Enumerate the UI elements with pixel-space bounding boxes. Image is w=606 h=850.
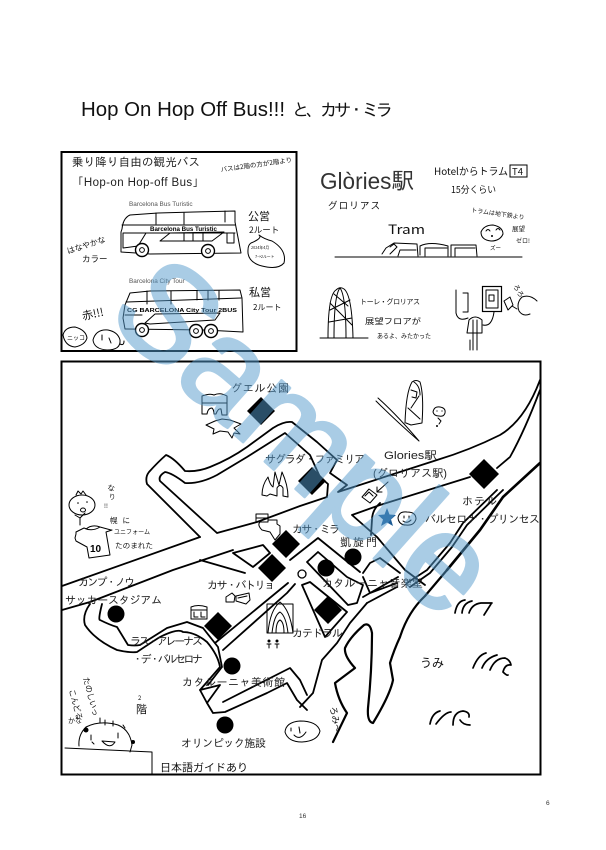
icon: Casa Mila building xyxy=(256,514,280,540)
marker: hotel xyxy=(469,459,499,489)
map labels: カタルーニャ美術館 xyxy=(182,676,285,689)
handwritten note: private 2 routes: 私営 xyxy=(249,284,271,300)
panel: Glories station notes xyxy=(320,163,537,350)
handwritten note: uniform: 幌に xyxy=(110,515,130,526)
icon: boy character with note: な xyxy=(106,482,116,494)
icon: blob character with sign xyxy=(65,718,152,774)
map labels: バルセロナ・プリンセス xyxy=(425,513,540,526)
map labels: Glories駅 xyxy=(384,450,437,462)
map labels: ホテル xyxy=(462,496,497,508)
icon: bottom face xyxy=(285,721,320,742)
handwritten note: fun xyxy=(66,676,101,726)
watermark: Sample: Sample xyxy=(85,227,527,644)
speech bubble note xyxy=(248,235,284,267)
label: Tram: Tram xyxy=(388,219,425,238)
panel heading xyxy=(72,156,204,189)
icon: waves xyxy=(430,600,511,725)
handwritten note: tower: あるよ、みたかった xyxy=(377,330,431,340)
title xyxy=(81,99,393,121)
handwritten note: tower: トーレ・グロリアス xyxy=(360,297,420,307)
handwritten note: from hotel by tram: T4 xyxy=(512,164,523,178)
page number: 16 xyxy=(299,813,307,820)
panel: hop-on hop-off bus xyxy=(62,152,296,351)
icon: boy character with note xyxy=(69,482,116,525)
map labels: (グロリアス駅) xyxy=(373,468,447,480)
handwritten heading: Glories station xyxy=(320,168,414,212)
star: Barcelona Princess xyxy=(378,508,396,526)
marker: Park Guell xyxy=(247,397,275,425)
small roundabout xyxy=(298,570,306,578)
handwritten note: uniform: たのまれた xyxy=(115,541,153,551)
marker: Palau de la Musica xyxy=(318,560,334,576)
icon: small face on map xyxy=(433,407,445,427)
handwritten note: uniform xyxy=(110,515,153,551)
speech bubble note: 2024年4月 xyxy=(251,245,269,251)
marker: Casa Batllo xyxy=(258,554,286,582)
marker: art museum xyxy=(224,658,240,674)
icon: uniform T-shirt xyxy=(75,526,112,558)
handwritten note: second floor: 2 xyxy=(138,693,142,702)
speech bubble note: 7→2ルート xyxy=(255,255,275,260)
handwritten heading: Glories station: グロリアス xyxy=(328,198,380,212)
icon: face with tram note: ズー xyxy=(490,244,501,252)
handwritten note: from hotel by tram xyxy=(434,163,527,196)
handwritten note: public 2 routes: 2ルート xyxy=(249,224,279,236)
icon: Park Guell lizard xyxy=(206,419,241,438)
map labels: カンプ・ノウ xyxy=(78,576,135,589)
icon: boy character with note: り xyxy=(109,491,116,501)
handwritten note: fun: こんどる xyxy=(66,688,85,721)
marker: Casa Mila xyxy=(272,530,300,558)
icon: two small people xyxy=(267,640,279,648)
map labels: ・デ・バルセロナ xyxy=(132,653,203,666)
panel heading: 乗り降り自由の観光バス xyxy=(72,156,200,169)
icon: two blob faces: ニッコ xyxy=(67,333,85,342)
map labels: カタルーニャ音楽堂 xyxy=(322,577,423,590)
handwritten note: uniform: ユニフォーム xyxy=(114,527,150,536)
panel heading: 「Hop-on Hop-off Bus」 xyxy=(72,176,204,189)
icon: face with tram note: 展望 xyxy=(512,223,526,233)
icon: Torre Glories tower xyxy=(320,288,368,338)
map labels: カサ・バトリョ xyxy=(207,580,275,592)
marker: Arc de Triomf xyxy=(344,548,362,566)
marker: Camp Nou xyxy=(108,606,124,622)
icon: Bus Turistic double-decker: Barcelona Bus Turistic xyxy=(150,226,217,233)
handwritten note: colours: カラー xyxy=(82,253,108,265)
handwritten note: colours: はなやかな xyxy=(66,234,107,257)
handwritten note: public 2 routes: 公営 xyxy=(248,208,270,224)
icon: Las Arenas building xyxy=(191,606,207,619)
icon: Sagrada Familia towers xyxy=(262,472,288,497)
handwritten note: top right: バスは2階の方が2階より xyxy=(220,154,293,174)
icon: face with tram note: トラムは地下鉄より xyxy=(471,205,525,221)
handwritten note: fun: かな xyxy=(68,716,82,726)
icon: Casa Batllo building xyxy=(226,593,250,604)
handwritten note: Zoom: ろみ〜 xyxy=(327,705,345,734)
icon: ticket machine with person: ろろ xyxy=(510,282,526,300)
icon: Glories tower on map xyxy=(405,380,423,425)
map labels: グエル公園 xyxy=(231,383,289,395)
label: Barcelona City Tour: Barcelona City Tour xyxy=(129,278,186,285)
handwritten note: tower: 展望フロアが xyxy=(365,316,421,327)
handwritten note: private 2 routes: 2ルート xyxy=(253,302,281,313)
handwritten note: second floor xyxy=(136,693,147,717)
handwritten note: public 2 routes xyxy=(248,208,279,236)
icon: tram xyxy=(335,243,522,257)
map labels: サグラダ・ファミリア xyxy=(265,453,365,466)
icon: two blob faces xyxy=(63,327,124,350)
map labels: カサ・ミラ xyxy=(292,524,340,536)
marker: Sagrada Familia xyxy=(298,467,326,495)
icon: boy character with note: !! xyxy=(104,501,108,510)
handwritten note: sea: うみ xyxy=(420,654,444,671)
icon: ticket machine with person xyxy=(456,282,537,350)
handwritten note: second floor: 階 xyxy=(136,701,147,717)
handwritten note: tower xyxy=(360,297,431,340)
road network xyxy=(62,380,540,742)
map labels: オリンピック施設 xyxy=(181,737,266,750)
marker: cathedral xyxy=(314,596,342,624)
map labels: サッカースタジアム xyxy=(65,594,162,607)
panel: map xyxy=(62,362,540,775)
icon: face with tram note: ゼロ! xyxy=(516,236,530,245)
map labels xyxy=(65,383,540,750)
title: と、カサ・ミラ xyxy=(292,100,393,120)
handwritten note: private 2 routes xyxy=(249,284,281,313)
handwritten heading: Glories station: Glòries駅 xyxy=(320,168,414,194)
icon: metro sign with arrow xyxy=(362,482,388,503)
icon: Bus Turistic double-decker xyxy=(121,211,241,258)
icon: smile face xyxy=(398,512,416,525)
handwritten note: fun: たのしいっ xyxy=(80,676,101,717)
handwritten note: red: 赤!!! xyxy=(81,304,105,324)
icon: uniform T-shirt: 10 xyxy=(90,544,102,555)
icon: Cathedral xyxy=(267,602,293,633)
icon: face with tram note xyxy=(471,205,530,252)
handwritten note: from hotel by tram: Hotelからトラム xyxy=(434,163,508,178)
map labels: カテドラル xyxy=(292,628,343,640)
map labels: 凱旋門 xyxy=(340,536,377,549)
icon: City Tour double-decker xyxy=(123,290,243,338)
handwritten note: guide: 日本語ガイドあり xyxy=(160,760,248,775)
corner number: 6 xyxy=(546,800,550,807)
title: Hop On Hop Off Bus!!! xyxy=(81,99,285,121)
icon: Park Guell gate xyxy=(202,394,227,415)
marker: Las Arenas xyxy=(204,612,232,640)
map labels: ラス・アレーナス xyxy=(130,636,203,648)
marker: Olympic facility xyxy=(216,716,234,734)
icon: City Tour double-decker: CG BARCELONA City Tour 2BUS xyxy=(127,308,237,314)
label: Barcelona Bus Turistic: Barcelona Bus Turistic xyxy=(129,201,193,208)
handwritten note: from hotel by tram: 15分くらい xyxy=(451,182,496,196)
